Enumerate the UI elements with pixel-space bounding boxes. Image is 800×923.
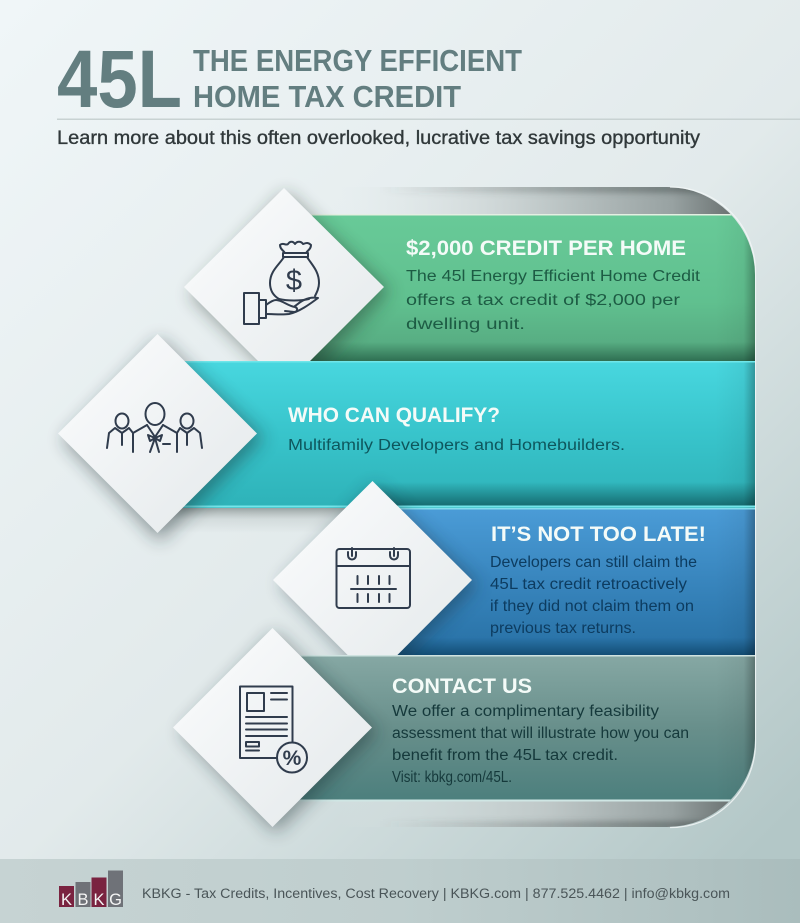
diamond: people icon card xyxy=(58,334,264,542)
panel: it's not too late xyxy=(273,481,755,655)
text: it's not too late xyxy=(490,522,706,637)
text: who can qualify: WHO CAN QUALIFY? xyxy=(288,403,500,427)
logo: KBKG: B xyxy=(77,891,89,909)
diamond: calendar icon card xyxy=(273,481,478,684)
subtitle: Learn more about this often overlooked, lucrative tax savings opportunity xyxy=(57,128,701,149)
title xyxy=(57,34,522,125)
text: it's not too late: if they did not claim them on xyxy=(490,598,694,615)
diamond: document icon card xyxy=(173,628,378,833)
text: $2,000 credit per home: The 45l Energy Efficient Home Credit xyxy=(406,268,701,285)
text: $2,000 credit per home xyxy=(406,236,701,333)
text: it's not too late: 45L tax credit retroactively xyxy=(490,576,687,593)
heading: 45L: 45L xyxy=(57,34,182,125)
text: $2,000 credit per home: offers a tax credit of $2,000 per xyxy=(406,292,680,309)
text: contact us: benefit from the 45L tax credit. xyxy=(392,747,618,764)
icon: money bag on hand: $ xyxy=(286,265,302,297)
panel: rounded frame top and bottom recess xyxy=(150,184,756,830)
text: contact us: assessment that will illustrate how you can xyxy=(392,725,689,742)
text: who can qualify: Multifamily Developers and Homebuilders. xyxy=(288,437,625,454)
heading: the energy efficient home tax credit: HOME TAX CREDIT xyxy=(193,79,461,114)
text: who can qualify xyxy=(288,403,625,454)
heading: the energy efficient home tax credit: THE ENERGY EFFICIENT xyxy=(193,43,522,78)
contact line: KBKG - Tax Credits, Incentives, Cost Recovery | KBKG.com | 877.525.4462 | info@kbkg.com xyxy=(142,886,730,901)
icon: three business people xyxy=(107,403,202,452)
logo: KBKG xyxy=(59,870,123,909)
diamond: money icon card xyxy=(184,188,390,394)
text: contact us: CONTACT US xyxy=(392,674,532,698)
footer xyxy=(0,859,800,923)
text: it's not too late: IT’S NOT TOO LATE! xyxy=(491,522,706,546)
logo: KBKG: G xyxy=(109,891,122,909)
panel: contact us xyxy=(173,628,755,833)
heading: the energy efficient home tax credit xyxy=(193,43,522,114)
icon: document with percent xyxy=(240,686,307,772)
text: $2,000 credit per home: dwelling unit. xyxy=(406,316,525,333)
text: contact us xyxy=(392,674,689,786)
text: contact us: We offer a complimentary feasibility xyxy=(392,703,659,720)
panel: $2,000 credit per home xyxy=(183,186,755,361)
logo: KBKG: K xyxy=(93,891,105,909)
panel: who can qualify xyxy=(58,334,755,542)
icon: calendar xyxy=(336,548,410,608)
icon: document with percent: % xyxy=(283,747,302,770)
text: contact us: Visit: kbkg.com/45L. xyxy=(392,769,512,786)
icon: money bag on hand xyxy=(244,242,319,324)
text: it's not too late: previous tax returns. xyxy=(490,620,636,637)
logo: KBKG: K xyxy=(61,891,72,909)
text: it's not too late: Developers can still claim the xyxy=(490,554,697,571)
text: $2,000 credit per home: $2,000 CREDIT PER HOME xyxy=(406,236,686,260)
